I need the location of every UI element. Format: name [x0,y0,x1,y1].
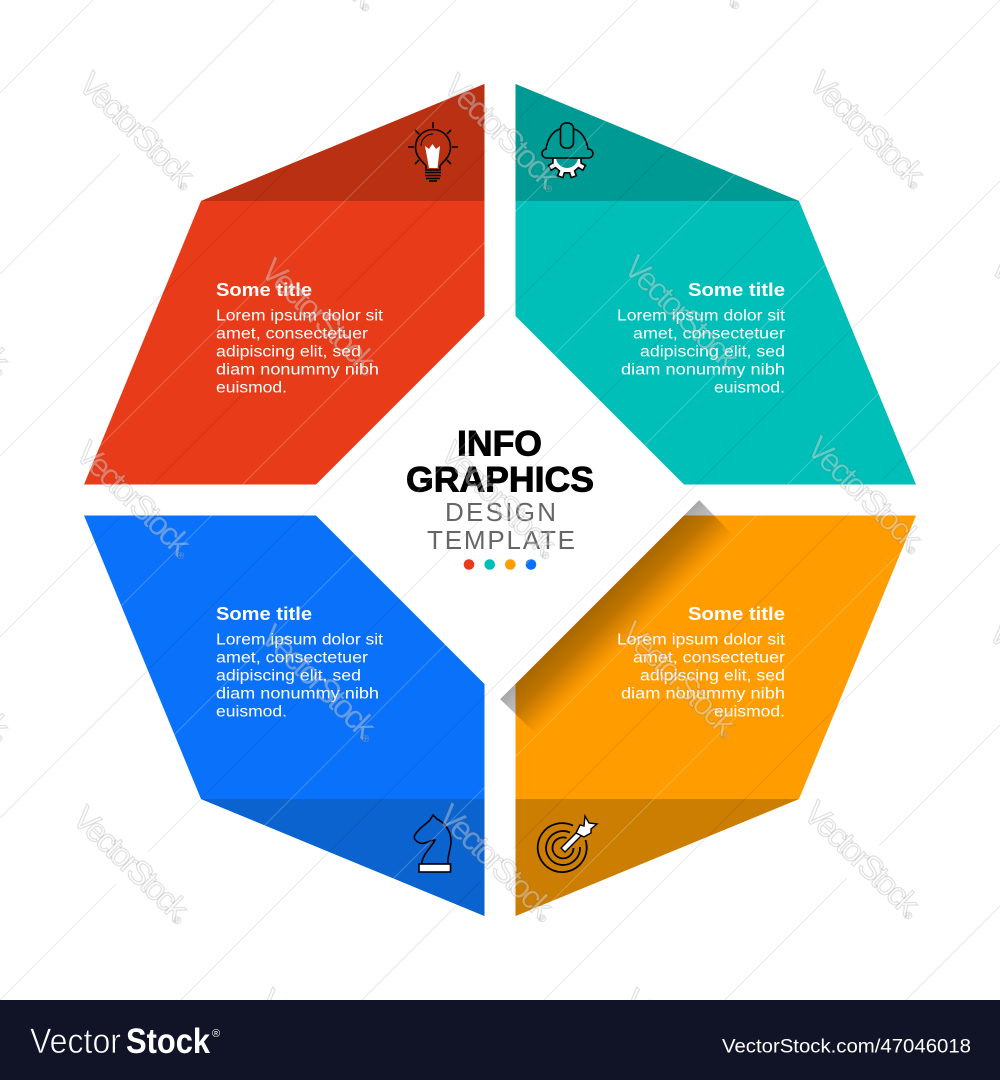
watermarks: VectorStock® [254,251,387,383]
watermarks: VectorStock® [437,67,570,199]
footer bar [0,1000,1000,1080]
subtitle: DESIGN TEMPLATE [427,497,575,555]
text block: blue segment: diam nonummy nibh [216,686,379,702]
title: INFO GRAPHICS: GRAPHICS [406,460,594,500]
text block: red segment: diam nonummy nibh [216,362,379,378]
legend dots [464,559,536,570]
footer logo: Vector [30,1022,121,1061]
subtitle: DESIGN TEMPLATE: DESIGN [445,497,556,527]
icon: chess knight [414,815,451,872]
watermarks: VectorStock® [254,617,387,749]
watermarks: VectorStock® [614,614,747,746]
title: blue segment: Some title [216,603,312,624]
text block: orange segment: euismod. [714,704,785,720]
text block: red segment [216,308,384,396]
fold shadow under the centre diamond [500,500,733,733]
watermarks: VectorStock® [800,429,933,561]
panel: red top-left segment [84,84,484,484]
watermarks: VectorStock® [72,65,205,197]
text block: orange segment [617,632,786,720]
footer logo: ® [212,1028,220,1040]
title: red segment: Some title [216,279,312,300]
text block: red segment: adipiscing elit, sed [216,344,361,360]
panel: teal top-right segment [516,84,916,484]
watermarks: VectorStock® [797,794,930,926]
title: orange segment: Some title [688,603,785,624]
text block: teal segment [617,308,786,396]
title: INFO GRAPHICS [406,424,594,500]
text block: blue segment: adipiscing elit, sed [216,668,361,684]
footer logo: Stock [126,1022,210,1061]
text block: teal segment: adipiscing elit, sed [640,344,785,360]
text block: orange segment: diam nonummy nibh [621,686,785,702]
text block: teal segment: euismod. [714,380,785,396]
text block: blue segment: Lorem ipsum dolor sit [216,632,384,648]
watermarks: VectorStock® [802,64,935,196]
text block: orange segment: amet, consectetuer [633,650,785,666]
watermarks: VectorStock® [66,799,199,931]
text block: blue segment: amet, consectetuer [216,650,368,666]
icon: light bulb [408,122,458,181]
title: INFO GRAPHICS: INFO [457,424,542,464]
panel: orange bottom-right segment [500,500,916,916]
text block: blue segment: euismod. [216,704,287,720]
text block: teal segment: amet, consectetuer [633,326,785,342]
icon: target with arrow [538,816,597,872]
panel: blue bottom-left segment [84,516,484,916]
text block: orange segment: Lorem ipsum dolor sit [617,632,786,648]
text block: orange segment: adipiscing elit, sed [640,668,785,684]
watermarks: VectorStock® [431,797,564,929]
watermarks: VectorStock® [434,434,567,566]
centre heading [406,424,594,570]
text block: blue segment [216,632,384,720]
text block: red segment: euismod. [216,380,287,396]
watermarks: VectorStock® [617,248,750,380]
watermarks: VectorStock® [69,434,202,566]
text block: red segment: Lorem ipsum dolor sit [216,308,384,324]
title: teal segment: Some title [688,279,785,300]
icon: hard hat with gear [542,123,593,178]
footer logo [30,1022,220,1061]
text block: teal segment: Lorem ipsum dolor sit [617,308,786,324]
text block: teal segment: diam nonummy nibh [621,362,785,378]
subtitle: DESIGN TEMPLATE: TEMPLATE [427,525,575,555]
text block: red segment: amet, consectetuer [216,326,368,342]
footer image id: VectorStock.com/47046018 [722,1036,971,1058]
